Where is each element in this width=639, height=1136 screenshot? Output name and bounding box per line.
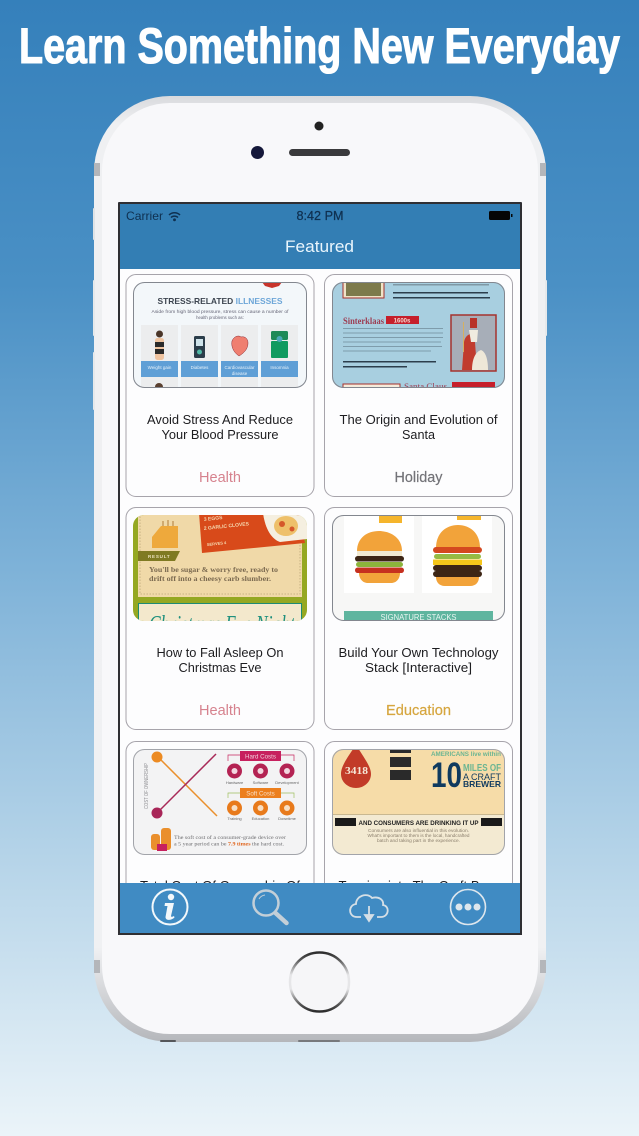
thumbnail: stress illnesses xyxy=(133,282,307,391)
category: Health xyxy=(199,470,241,486)
thumbnail: cost: Hard Costs xyxy=(245,754,276,760)
thumbnail: santa: 1600s xyxy=(394,318,411,324)
thumbnail: cheese: drift off into a cheesy carb slumber. xyxy=(149,575,271,583)
icon: more xyxy=(450,890,486,924)
thumbnail: cost: a 5 year period can be 7.9 times the hard cost. xyxy=(174,842,284,848)
thumbnail: cheese: Christmas Eve Night xyxy=(149,612,296,638)
card: santa xyxy=(324,274,512,496)
card: burgers xyxy=(324,508,512,730)
thumbnail: cheese: RESULT xyxy=(148,554,170,559)
wifi icon xyxy=(169,213,180,220)
thumbnail: stress illnesses: health problems such as: xyxy=(196,315,244,320)
phone body xyxy=(94,96,546,1042)
card title: The Origin and Evolution of xyxy=(340,412,498,427)
thumbnail: craft beer: A CRAFT xyxy=(463,772,501,782)
thumbnail: cheese: You'll be sugar & worry free, ready to xyxy=(149,566,278,574)
thumbnail: craft beer: 3418 xyxy=(345,765,369,777)
thumbnail: stress illnesses: STRESS-RELATED ILLNESSES xyxy=(158,296,283,306)
thumbnail: craft beer: BREWER xyxy=(463,779,501,789)
card: stress: Your Blood Pressure xyxy=(162,427,278,442)
category: Holiday xyxy=(394,470,443,486)
card title: How to Fall Asleep On xyxy=(156,645,284,660)
nav bar xyxy=(120,204,520,269)
thumbnail: craft beer: 10 xyxy=(431,756,462,795)
tab bar xyxy=(118,883,522,935)
card: craft beer xyxy=(324,741,513,883)
carrier label: Carrier xyxy=(126,209,163,223)
thumbnail: stress illnesses: Diabetes xyxy=(191,365,209,370)
screen xyxy=(118,202,522,935)
card title: Avoid Stress And Reduce xyxy=(147,412,293,427)
thumbnail: burgers xyxy=(344,516,493,620)
thumbnail: cheese: SERVES 4 xyxy=(207,540,227,547)
battery icon xyxy=(489,211,510,220)
card: stress xyxy=(126,274,314,496)
thumbnail: craft beer: What's important to them is the local, handcrafted xyxy=(368,833,470,838)
thumbnail: stress illnesses: disease xyxy=(232,371,248,376)
thumbnail: cost: Soft Costs xyxy=(246,790,275,798)
card: christmas: Christmas Eve xyxy=(178,660,262,675)
clock: 8:42 PM xyxy=(296,209,344,223)
thumbnail: stress illnesses: Insomnia xyxy=(270,365,289,370)
camera xyxy=(251,146,264,159)
thumbnail: craft beer: Consumers are also influential in this evolution. xyxy=(368,828,469,833)
category: Education xyxy=(386,703,451,719)
thumbnail: cost xyxy=(133,749,307,855)
card title: Tapping into The Craft Beer xyxy=(338,878,499,893)
thumbnail: stress illnesses: Cardiovascular xyxy=(224,365,255,370)
sensor dot xyxy=(314,122,324,130)
card: cost of ownership xyxy=(126,741,314,883)
category: Health xyxy=(199,703,241,719)
thumbnail: cost: Training xyxy=(227,816,242,821)
thumbnail: stress illnesses: Weight gain xyxy=(148,365,172,370)
icon: info xyxy=(152,890,188,924)
thumbnail: cost: COST OF OWNERSHIP xyxy=(144,763,150,809)
card: burgers: Stack [Interactive] xyxy=(365,660,472,675)
thumbnail: cost: Education xyxy=(252,816,269,821)
thumbnail: cost: Software xyxy=(253,780,269,785)
thumbnail: cost: Downtime xyxy=(278,816,297,821)
thumbnail: craft beer xyxy=(332,745,505,855)
card title: Build Your Own Technology xyxy=(338,645,499,660)
card: santa: Santa xyxy=(402,427,436,442)
thumbnail: cheese: 2 GARLIC CLOVES xyxy=(204,521,250,532)
thumbnail: santa xyxy=(332,280,505,394)
card: christmas xyxy=(126,508,314,730)
home button xyxy=(290,952,349,1012)
thumbnail: craft beer: MILES OF xyxy=(463,762,501,774)
thumbnail: craft beer: batch and taking part in the experience. xyxy=(377,838,460,843)
thumbnail: cost: Development xyxy=(275,780,300,785)
phone xyxy=(93,96,547,1042)
thumbnail: craft beer: AMERICANS live within xyxy=(431,751,501,758)
icon: search xyxy=(254,890,286,923)
thumbnail: craft beer: AND CONSUMERS ARE DRINKING IT UP xyxy=(358,820,479,827)
speaker xyxy=(289,149,350,156)
thumbnail: cheese xyxy=(133,515,307,621)
thumbnail: burgers: SIGNATURE STACKS xyxy=(380,613,456,622)
icon: cloud download xyxy=(350,895,388,921)
thumbnail: cheese: 3 EGGS xyxy=(204,515,223,523)
thumbnail: cost: The soft cost of a consumer-grade device over xyxy=(174,834,286,841)
nav title: Featured xyxy=(285,237,354,256)
thumbnail: santa: Santa Claus xyxy=(404,382,447,391)
thumbnail: stress illnesses: Aside from high blood pressure, stress can cause a number of xyxy=(152,309,289,314)
card title: Total Cost Of Ownership Of xyxy=(140,878,300,893)
thumbnail: santa: Sinterklaas xyxy=(343,316,384,326)
thumbnail: cost: Hardware xyxy=(226,780,244,785)
